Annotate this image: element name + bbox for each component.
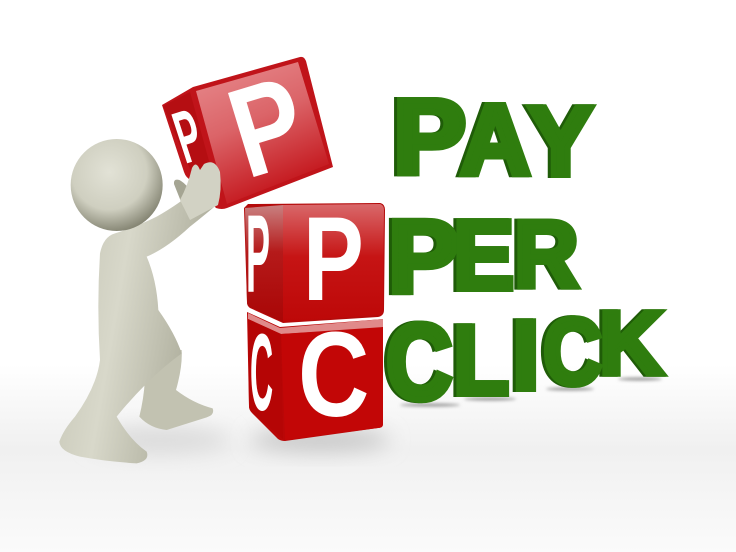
cube: top tilted P <box>162 48 333 209</box>
letter P big: P <box>303 192 364 326</box>
heading word: CLICK: C <box>543 298 602 404</box>
heading word: PER: E <box>453 201 514 311</box>
heading word: PAY: P <box>393 77 466 196</box>
cube: middle P <box>244 192 385 326</box>
left face <box>163 92 217 190</box>
torso and front leg <box>59 190 218 463</box>
heading word: CLICK: K <box>599 294 664 394</box>
heading word: PER: P <box>388 199 459 315</box>
back leg <box>139 350 213 430</box>
back arm <box>150 180 197 237</box>
letter C side: C <box>250 312 273 434</box>
figure: person pushing cube <box>59 139 220 463</box>
left face <box>248 319 283 439</box>
heading word: CLICK: L <box>453 306 509 416</box>
letter P side: P <box>164 93 212 180</box>
heading word: PAY: Y <box>528 86 593 196</box>
front hand <box>190 162 220 203</box>
heading word: CLICK: C <box>386 302 452 423</box>
left face <box>245 205 283 322</box>
heading word: PER <box>388 199 579 315</box>
front hand overlay <box>180 162 221 220</box>
front face <box>281 327 383 440</box>
letter P side: P <box>246 194 270 316</box>
letter P big: P <box>213 48 322 205</box>
floor shading <box>0 365 736 552</box>
top face <box>248 313 383 334</box>
cube: bottom C <box>247 308 383 442</box>
heading word: PAY <box>393 77 593 196</box>
front face <box>283 204 384 322</box>
heading word: CLICK <box>386 294 664 423</box>
heading word: PER: R <box>514 201 579 308</box>
front face <box>196 62 329 204</box>
heading word: CLICK: I <box>512 300 540 410</box>
heading word: PAY: A <box>460 83 531 195</box>
letter C big: C <box>298 308 369 442</box>
head <box>71 139 163 231</box>
